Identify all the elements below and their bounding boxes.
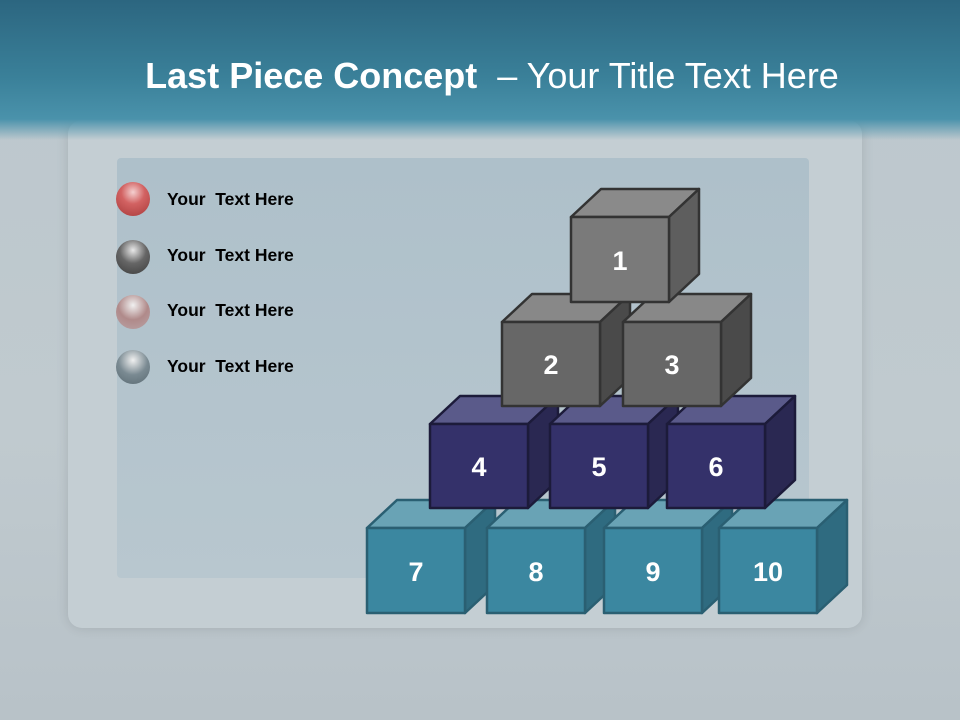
bullet list: Your Text Here bbox=[167, 300, 294, 320]
row middle: 5 bbox=[591, 452, 607, 482]
row middle: 4 bbox=[471, 452, 487, 482]
row top: 3 bbox=[664, 350, 680, 380]
row top bbox=[502, 189, 751, 406]
bullet 2 bbox=[116, 240, 150, 274]
bullet list: Your Text Here bbox=[167, 245, 294, 265]
bullet 1 bbox=[116, 182, 150, 216]
bullet 3 bbox=[116, 295, 150, 329]
row top: 1 bbox=[612, 246, 628, 276]
bullet list: Your Text Here bbox=[167, 356, 294, 376]
row bottom bbox=[367, 500, 847, 613]
row middle bbox=[430, 396, 795, 508]
tablet screen bbox=[117, 158, 809, 578]
tablet frame bbox=[68, 120, 862, 628]
row bottom: 9 bbox=[645, 557, 661, 587]
row middle: 6 bbox=[708, 452, 724, 482]
header band bbox=[0, 0, 960, 140]
bullet list: Your Text Here bbox=[167, 189, 294, 209]
bullet 4 bbox=[116, 350, 150, 384]
row bottom: 10 bbox=[753, 557, 783, 587]
bullet list bbox=[116, 182, 294, 384]
row bottom: 8 bbox=[528, 557, 544, 587]
title: Last Piece Concept – Your Title Text Here bbox=[145, 55, 839, 96]
row bottom: 7 bbox=[408, 557, 424, 587]
row top: 2 bbox=[543, 350, 559, 380]
